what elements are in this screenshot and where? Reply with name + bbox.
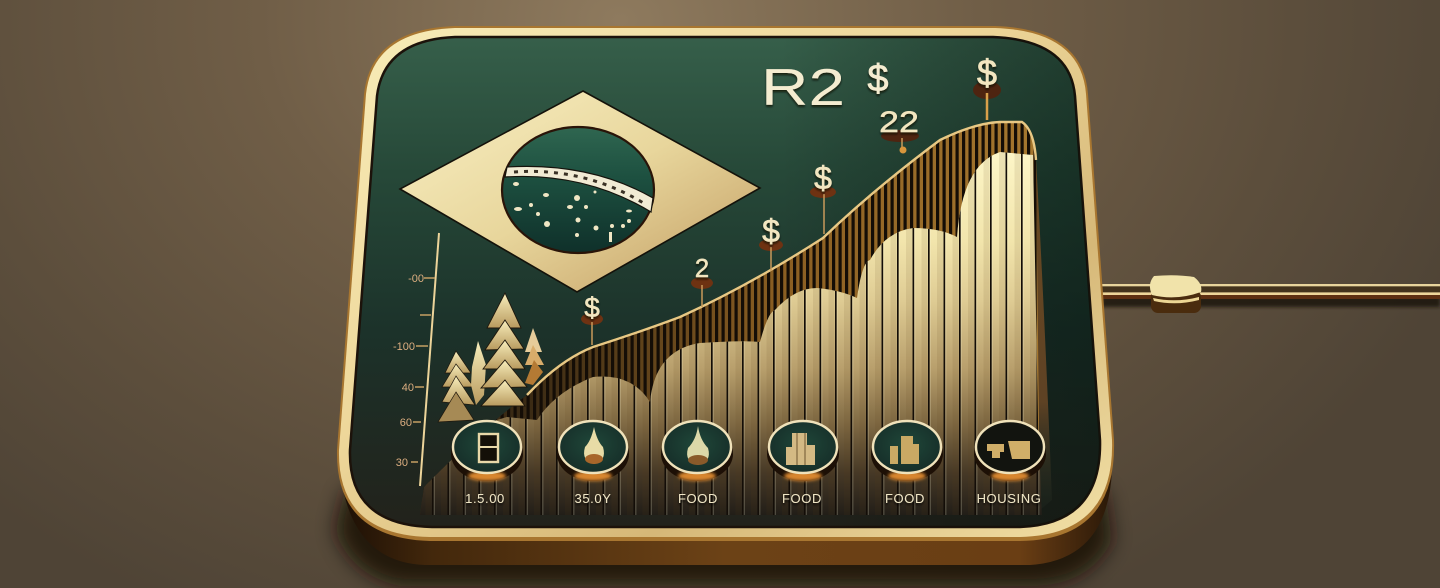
title: R2: R2: [761, 59, 845, 117]
axis line: [420, 233, 439, 486]
category icon 5: [871, 421, 943, 481]
category labels: 1.5.00: [465, 491, 505, 506]
small right tree: [525, 328, 544, 385]
marker: dollar four: [973, 52, 1001, 120]
marker: twenty-two: 22: [879, 106, 919, 139]
hatched area under curve: [420, 122, 1040, 515]
category labels: HOUSING: [977, 491, 1041, 506]
thin middle tree: [471, 341, 486, 405]
category labels: FOOD: [678, 491, 718, 506]
marker: dollar three: $: [814, 160, 832, 196]
axis labels: 30: [396, 457, 408, 469]
category labels: 35.0Y: [575, 491, 611, 506]
flag band: [505, 166, 653, 212]
cable connector: [1150, 275, 1201, 313]
flag stars: [513, 182, 632, 242]
category icon 2: [557, 421, 629, 481]
title: dollar: $: [867, 58, 889, 100]
category icon 6: [974, 421, 1046, 481]
panel: [337, 26, 1114, 541]
rising curve: [527, 122, 1036, 395]
panel gold rim: [339, 28, 1112, 537]
trees: [438, 293, 544, 422]
cable: [1102, 275, 1440, 313]
marker: dollar one: [581, 292, 603, 345]
marker: dollar two: $: [762, 213, 780, 249]
vertical axis: [393, 233, 439, 486]
marker: dollar four: $: [977, 52, 997, 93]
marker: two: 2: [695, 253, 709, 283]
flag of Brazil: [400, 91, 760, 292]
category icon 4: [767, 421, 839, 481]
axis labels: -00: [408, 273, 424, 285]
axis labels: 60: [400, 417, 412, 429]
large tree: [481, 293, 527, 406]
category labels: FOOD: [885, 491, 925, 506]
panel bronze edge: [337, 26, 1114, 541]
panel shadow: [335, 490, 1112, 586]
marker: dollar two: [759, 213, 783, 271]
marker: dollar three: [810, 160, 836, 234]
flag globe: [502, 127, 654, 253]
axis labels: -100: [393, 341, 415, 353]
right bronze edge: [1030, 160, 1052, 510]
marker: two: [691, 253, 713, 307]
marker: dollar one: $: [584, 292, 600, 323]
chart: [418, 122, 1052, 520]
category icon 3: [661, 421, 733, 481]
axis labels: 40: [402, 382, 414, 394]
flag diamond: [400, 91, 760, 292]
gold bars: [418, 152, 1042, 520]
category labels: FOOD: [782, 491, 822, 506]
panel base: [340, 470, 1112, 565]
small left tree: [438, 351, 475, 422]
category icon 1: [451, 421, 523, 481]
panel green face: [350, 37, 1100, 527]
axis labels: [393, 273, 424, 469]
category labels: [465, 491, 1041, 506]
marker: twenty-two: [879, 106, 919, 154]
